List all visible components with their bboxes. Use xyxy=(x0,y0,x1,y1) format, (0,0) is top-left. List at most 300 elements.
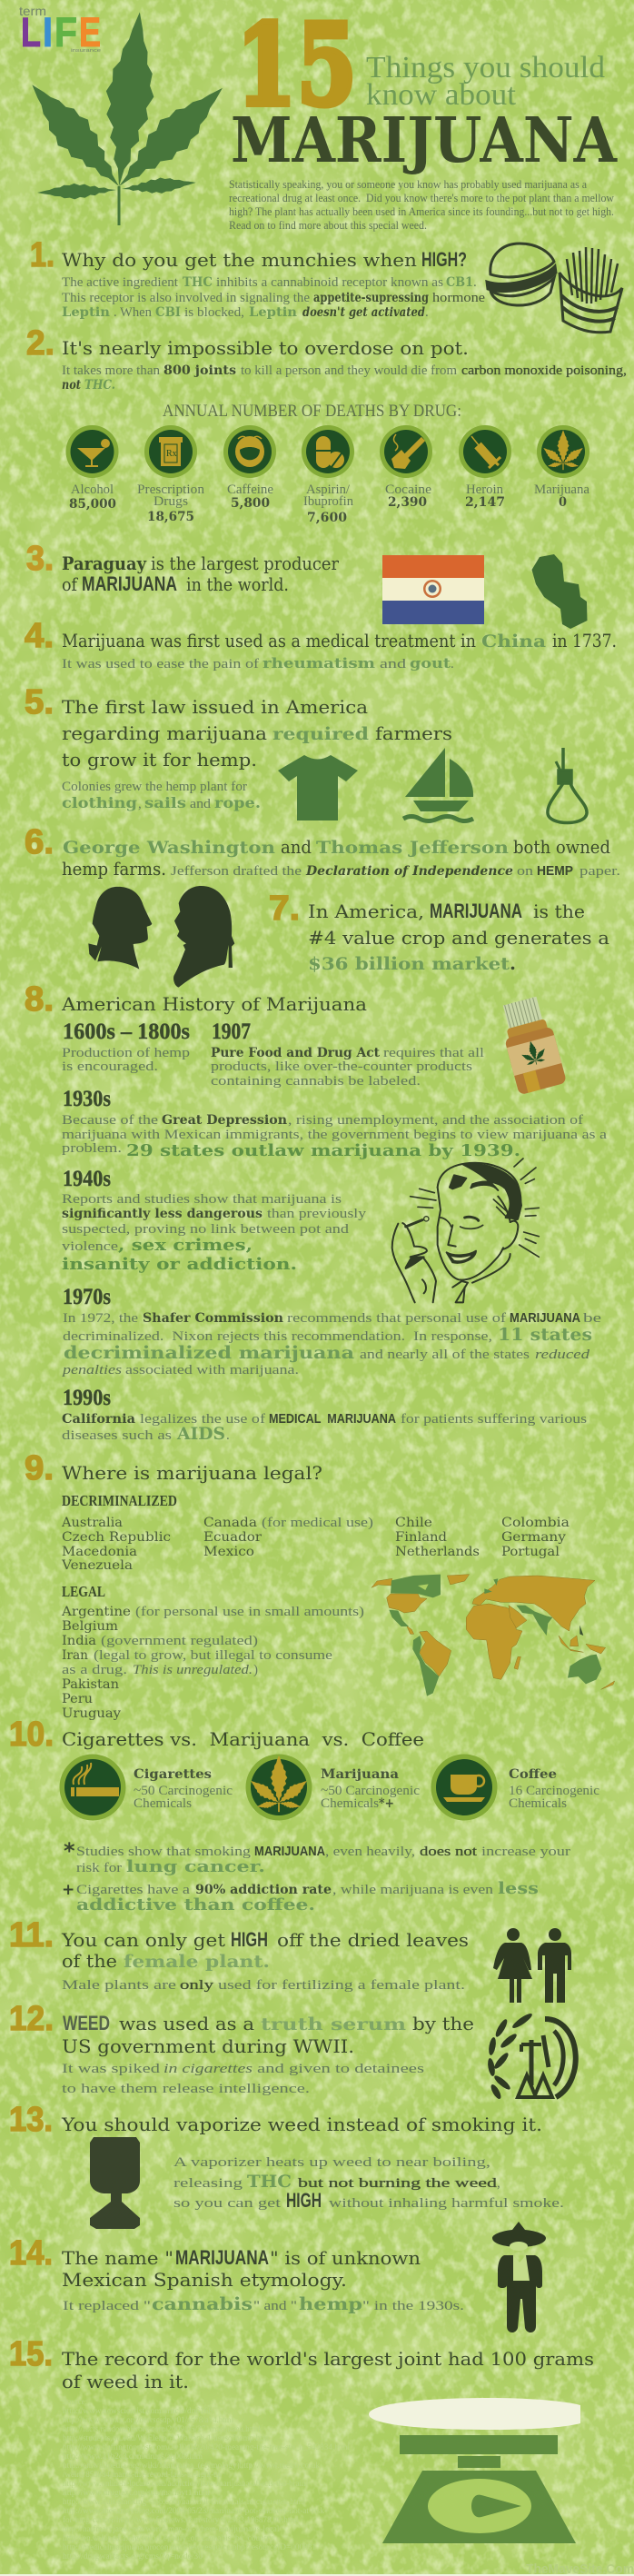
section 3: Paraguay: Paraguay xyxy=(62,552,147,574)
section 13: vaporize: but not burning the weed xyxy=(298,2176,498,2191)
list: legal countries: (government regulated) xyxy=(101,1634,258,1648)
list: legal countries: as a drug. xyxy=(62,1663,127,1677)
footnotes: lung cancer. xyxy=(126,1857,265,1876)
badge: alcohol xyxy=(65,425,118,512)
timeline: 1600s to 1800s xyxy=(62,1019,190,1074)
timeline: 1970s: decriminalized marijuana xyxy=(64,1343,354,1363)
list: legal countries xyxy=(61,1583,364,1721)
footnotes: Studies show that smoking xyxy=(76,1845,252,1859)
footnotes: Cigarettes have a xyxy=(76,1883,190,1897)
section 7: value crop: is the xyxy=(533,900,585,922)
list: decriminalized countries: Ecuador xyxy=(203,1530,262,1545)
section 3: Paraguay: is the largest producer xyxy=(151,552,339,574)
section 14: etymology: It replaced " xyxy=(63,2299,151,2313)
section 5: first law: sails xyxy=(144,794,186,811)
section 11: female plant xyxy=(9,1916,469,1993)
text block: sources: http://www.thecancerblog.com/2006/05/23/marijuana-pot-smokers-not-at-risk- xyxy=(63,2506,327,2515)
badge: aspirin and ibuprofen xyxy=(302,425,354,525)
timeline: 1940s: , sex crimes, xyxy=(118,1236,253,1255)
icon: sailboat xyxy=(403,748,473,821)
section 4: China: gout xyxy=(410,655,451,671)
list: legal countries: ) xyxy=(253,1663,258,1677)
illustration: retro man with joint xyxy=(392,1159,539,1302)
list: decriminalized countries: Mexico xyxy=(203,1545,254,1559)
section 2: overdose xyxy=(26,324,627,393)
section 1: munchies: CBI xyxy=(155,305,181,320)
comparison: coffee: 16 Carcinogenic xyxy=(509,1784,599,1798)
text block: sources: /weird/853884/marks-the-record-fails-to-light-up xyxy=(63,2470,222,2479)
text block: sources: http://drugwarfacts.org/cms/?q=node/30 xyxy=(63,2551,203,2561)
timeline: 1930s: problem. xyxy=(62,1141,122,1156)
comparison: coffee: Coffee xyxy=(509,1767,557,1782)
comparison: coffee: Chemicals xyxy=(509,1796,567,1811)
logo: term LIFE insurance: E xyxy=(79,9,101,55)
section 1: munchies: Why do you get the munchies when xyxy=(62,249,417,271)
section 6: Washington and Jefferson: hemp farms. xyxy=(62,858,166,880)
footnotes: risk for xyxy=(76,1861,122,1875)
section 15: largest joint: The record for the world's largest joint had 100 grams xyxy=(62,2348,594,2370)
list: decriminalized countries: Macedonia xyxy=(62,1545,137,1559)
comparison: marijuana: Chemicals xyxy=(321,1796,379,1811)
section 2: overdose: 800 joints xyxy=(163,363,236,378)
timeline: 1970s: 1970s xyxy=(63,1285,111,1309)
timeline: 1940s: significantly less dangerous xyxy=(62,1207,263,1221)
footnotes: addictive than coffee. xyxy=(76,1895,315,1915)
section 13: vaporize xyxy=(9,2101,564,2212)
section 12: truth serum: was used as a xyxy=(119,2013,254,2034)
section 1: munchies: appetite-supressing xyxy=(313,291,429,305)
section 13: vaporize: THC xyxy=(247,2172,292,2192)
list: legal countries: Iran xyxy=(62,1648,88,1663)
icon: man in sombrero xyxy=(492,2222,546,2332)
badge: prescription drugs: 18,675 xyxy=(147,510,194,524)
timeline: 1930s xyxy=(62,1087,607,1160)
section 5: first law: 5. xyxy=(25,683,54,721)
text block: sources: http://www.quit-smoking-stop.com/harmful-chemicals-in-cigarettes.html xyxy=(63,2497,306,2506)
icon: IRS seal xyxy=(487,2012,576,2101)
section 15: largest joint: of weed in it. xyxy=(62,2371,189,2392)
badge: aspirin and ibuprofen: Ibuprofin xyxy=(303,494,353,509)
chart: annual deaths by drug icons xyxy=(65,425,589,525)
timeline: 1970s: penalties xyxy=(62,1363,122,1378)
section 3: Paraguay: of xyxy=(62,573,78,595)
section 6: Washington and Jefferson: on xyxy=(517,864,534,879)
timeline: 1940s xyxy=(62,1167,367,1274)
section 14: etymology: cannabis xyxy=(152,2294,253,2314)
timeline: 1907: products, like over-the-counter products xyxy=(211,1059,472,1074)
badge: heroin: Heroin xyxy=(466,482,503,497)
section 5: first law: and xyxy=(190,797,212,811)
section 1: munchies: doesn't get activated xyxy=(302,305,425,320)
timeline: 1970s: decriminalized. Nixon rejects this recommendation. In response, xyxy=(63,1329,492,1344)
comparison: marijuana: ~50 Carcinogenic xyxy=(321,1784,420,1798)
section 12: truth serum: It was spiked xyxy=(62,2062,161,2076)
footnotes xyxy=(62,1838,570,1915)
section 1: munchies: . xyxy=(473,275,477,290)
badge: heroin: 2,147 xyxy=(465,495,505,510)
text block: sources: for-lung-cancer/http://www.foxnews.com/story/0,2933,196878,00.html xyxy=(63,2515,299,2524)
timeline: 1970s: In 1972, the xyxy=(63,1311,138,1326)
section 5: first law: , xyxy=(138,797,142,811)
section 13: vaporize: without inhaling harmful smoke. xyxy=(329,2196,564,2211)
section 12: truth serum: and given to detainees xyxy=(257,2062,424,2076)
badge: marijuana xyxy=(534,425,589,510)
timeline: 1930s: , rising unemployment, and the association of xyxy=(288,1113,583,1128)
list: legal countries: Pakistan xyxy=(62,1677,119,1692)
section 14: etymology: MARIJUANA xyxy=(175,2246,269,2269)
timeline: 1907: containing cannabis be labeled. xyxy=(211,1074,421,1089)
section 11: female plant: Male plants are xyxy=(62,1978,176,1993)
timeline: 1907: Pure Food and Drug Act xyxy=(211,1046,381,1060)
footnotes: less xyxy=(498,1879,539,1898)
list: decriminalized countries: Australia xyxy=(61,1516,123,1530)
section 3: Paraguay xyxy=(26,540,339,595)
icon: large cannabis leaf xyxy=(17,9,236,225)
text block: sources: http://www.mapinc.org/newscsdp/v01/a578/a14.html xyxy=(63,2415,233,2424)
icon: Paraguay map xyxy=(532,554,587,629)
section 14: etymology: hemp xyxy=(299,2294,362,2314)
section 5: first law xyxy=(25,683,452,811)
timeline: 1907: requires that all xyxy=(383,1046,484,1060)
section 11: female plant: 11. xyxy=(9,1916,54,1954)
timeline: 1940s: Reports and studies show that marijuana is xyxy=(62,1192,342,1207)
section 6: Washington and Jefferson xyxy=(25,823,620,880)
section 7: value crop: $36 billion market xyxy=(308,954,510,974)
timeline: 1600s to 1800s: 1600s – 1800s xyxy=(63,1019,190,1044)
comparison: cigarettes: ~50 Carcinogenic xyxy=(134,1784,233,1798)
badge: marijuana: Marijuana xyxy=(534,482,589,497)
timeline: 1930s: 1930s xyxy=(63,1087,111,1111)
badge: caffeine xyxy=(223,425,276,511)
badge: heroin xyxy=(459,425,511,510)
section 8: American history xyxy=(25,980,607,1444)
text block: sources: http://medicalmarijuana.procon.org/view.resource.php?resourceID=000881 xyxy=(63,2542,316,2551)
section 1: munchies: CB1 xyxy=(446,275,473,290)
timeline: 1970s: be xyxy=(583,1311,601,1326)
section 12: truth serum: truth serum xyxy=(261,2014,406,2034)
intro text: Read on to find more about this special weed. xyxy=(229,219,427,232)
timeline: 1940s: insanity or addiction. xyxy=(62,1255,297,1274)
section 4: China: Marijuana was first used as a medical treatment in xyxy=(62,630,476,651)
section 7: value crop: . xyxy=(510,952,516,974)
section 4: China: rheumatism xyxy=(263,655,375,671)
comparison: marijuana: *+ xyxy=(379,1796,394,1811)
timeline: 1990s: California xyxy=(62,1412,135,1427)
comparison: cigarettes: Cigarettes xyxy=(134,1767,212,1782)
icon: burger xyxy=(487,244,556,305)
section 5: first law: rope. xyxy=(214,794,261,811)
timeline: 1990s: for patients suffering various xyxy=(401,1412,587,1427)
logo: term LIFE insurance: F xyxy=(54,9,77,55)
section 14: etymology: " is of unknown xyxy=(270,2247,421,2269)
section 5: first law: The first law issued in America xyxy=(62,696,368,718)
icon: Jefferson silhouette xyxy=(173,886,234,988)
section 2: overdose: carbon monoxide poisoning, xyxy=(461,363,627,378)
timeline: 1990s xyxy=(62,1386,587,1444)
section 1: munchies: HIGH? xyxy=(421,248,467,271)
list: legal countries: Uruguay xyxy=(62,1706,121,1721)
list: legal countries: LEGAL xyxy=(62,1583,105,1600)
title: know about xyxy=(366,78,517,112)
list: decriminalized countries: Finland xyxy=(395,1530,447,1545)
section 12: truth serum: US government during WWII. xyxy=(62,2035,354,2057)
list: decriminalized countries: Portugal xyxy=(501,1545,560,1559)
section 4: China: . xyxy=(451,657,454,671)
section 1: munchies: Leptin xyxy=(62,305,110,320)
section 12: truth serum xyxy=(9,2000,474,2096)
section 5: first law: clothing xyxy=(62,794,137,811)
section 7: value crop: MARIJUANA xyxy=(430,900,522,922)
list: legal countries: Belgium xyxy=(62,1619,118,1634)
section 2: overdose: THC. xyxy=(84,378,115,393)
section 1: munchies: 1. xyxy=(30,236,54,274)
section 4: China xyxy=(25,617,617,671)
timeline: 1990s: . xyxy=(226,1428,230,1443)
icon: medicine bottle with leaf xyxy=(496,995,567,1095)
list: decriminalized countries: Chile xyxy=(395,1516,432,1530)
section 15: largest joint xyxy=(9,2335,594,2392)
section 11: female plant: only xyxy=(180,1978,214,1993)
timeline: 1990s: diseases such as xyxy=(62,1428,172,1443)
footnotes: does not xyxy=(420,1845,478,1859)
badge: alcohol: Alcohol xyxy=(71,482,114,497)
badge: cocaine xyxy=(380,425,432,510)
logo: term LIFE insurance: insurance xyxy=(71,48,101,54)
text block: sources xyxy=(63,2397,350,2561)
section 1: munchies xyxy=(30,236,485,320)
icon: Washington silhouette xyxy=(88,887,152,970)
section 11: female plant: of the xyxy=(62,1950,117,1972)
timeline: 1990s: 1990s xyxy=(63,1386,111,1410)
timeline: 1970s: recommends that personal use of xyxy=(287,1311,506,1326)
badge: alcohol: 85,000 xyxy=(69,497,116,512)
text block: sources: http://www.newscientist.com/article/dn6168 xyxy=(63,2406,213,2415)
logo: term LIFE insurance: I xyxy=(43,9,53,55)
logo: term LIFE insurance: term xyxy=(19,4,46,18)
section 1: munchies: Leptin xyxy=(249,305,297,320)
heading: annual deaths by drug: ANNUAL NUMBER OF DEATHS BY DRUG: xyxy=(163,402,461,421)
section 13: vaporize: 13. xyxy=(9,2101,53,2139)
section 13: vaporize: so you can get xyxy=(173,2196,282,2211)
comparison: marijuana: Marijuana xyxy=(321,1767,399,1782)
section 8: American history: 8. xyxy=(25,980,54,1019)
section 13: vaporize: You should vaporize weed instead of smoking it. xyxy=(61,2114,542,2135)
list: legal countries: (legal to grow, but illegal to consume xyxy=(94,1648,332,1663)
timeline: 1930s: marijuana with Mexican immigrants, the government begins to view marijuana as a xyxy=(62,1128,607,1142)
list: decriminalized countries: Czech Republic xyxy=(62,1530,171,1545)
badge: marijuana: 0 xyxy=(559,495,567,510)
section 7: value crop: 7. xyxy=(269,890,300,928)
timeline: 1940s: than previously xyxy=(267,1207,367,1221)
text block: sources: http://www.onlinehelpcare.com/addiction/how-marijuana-affects-the-brain/ xyxy=(63,2479,308,2488)
list: legal countries: (for personal use in small amounts) xyxy=(135,1605,364,1619)
timeline: 1930s: 29 states outlaw marijuana by 1939. xyxy=(126,1141,520,1160)
section 5: first law: Colonies grew the hemp plant for xyxy=(62,780,247,794)
section 13: vaporize: HIGH xyxy=(286,2189,322,2212)
section 1: munchies: hormone xyxy=(432,291,485,305)
timeline: 1970s: and nearly all of the states xyxy=(360,1348,530,1362)
section 1: munchies: . When xyxy=(114,305,152,320)
badge: caffeine: Caffeine xyxy=(227,482,273,497)
section 12: truth serum: in cigarettes xyxy=(163,2062,253,2076)
timeline: 1600s to 1800s: is encouraged. xyxy=(62,1059,158,1074)
section 3: Paraguay: in the world. xyxy=(186,573,289,595)
title xyxy=(231,0,618,177)
section 5: first law: required xyxy=(272,724,369,744)
timeline: 1930s: Great Depression xyxy=(162,1113,287,1128)
section 9: where legal xyxy=(25,1449,570,1721)
text block: sources: http://students.ou.edu/W/Elena.A.Wallach-1/usesofhemp.htm xyxy=(63,2433,269,2442)
timeline: 1970s: 11 states xyxy=(498,1325,592,1345)
section 14: etymology: Mexican Spanish etymology. xyxy=(62,2269,347,2291)
intro text: recreational drug at least once. Did you know there's more to the pot plant than a mellow xyxy=(229,192,614,204)
section 6: Washington and Jefferson: both owned xyxy=(513,836,610,858)
section 6: Washington and Jefferson: 6. xyxy=(25,823,54,861)
section 14: etymology: " in the 1930s. xyxy=(362,2299,464,2313)
timeline: 1970s: reduced xyxy=(535,1348,590,1362)
timeline: 1907 xyxy=(211,1019,484,1089)
section 6: Washington and Jefferson: HEMP xyxy=(537,863,573,879)
section 13: vaporize: A vaporizer heats up weed to near boiling, xyxy=(173,2155,490,2170)
timeline: 1990s: MEDICAL MARIJUANA xyxy=(269,1411,396,1427)
section 1: munchies: This receptor is also involved in signaling the xyxy=(62,291,310,305)
text block: sources: http://facts.randomhistory.com/2009/05/27_marijuana.html xyxy=(63,2424,262,2433)
section 8: American history: American History of Marijuana xyxy=(61,993,367,1015)
icon: joint on scale xyxy=(369,2398,580,2543)
list: decriminalized countries: Netherlands xyxy=(395,1545,480,1559)
section 14: etymology: 14. xyxy=(9,2234,53,2273)
section 7: value crop: #4 value crop and generates a xyxy=(308,927,609,949)
timeline: 1970s: MARIJUANA xyxy=(510,1310,580,1326)
section 7: value crop xyxy=(269,890,609,974)
section 4: China: 4. xyxy=(25,617,54,655)
section 6: Washington and Jefferson: Jefferson drafted the xyxy=(171,864,302,879)
text block: sources: http://en.wikipedia.org/wiki/Marijuana_(etymology)http://www.metro.co.uk xyxy=(63,2461,321,2470)
text block: sources: http://www.a1b2c3.com/drugs/ap008.htm xyxy=(63,2452,203,2461)
intro text: Statistically speaking, you or someone you know has probably used marijuana as a xyxy=(229,178,587,191)
footnotes: , even heavily, xyxy=(325,1845,415,1859)
section 5: first law: to grow it for hemp. xyxy=(62,749,257,771)
title: 15 xyxy=(236,0,357,132)
section 6: Washington and Jefferson: George Washington xyxy=(63,838,275,858)
section 11: female plant: female plant. xyxy=(124,1952,270,1972)
icon: t-shirt xyxy=(278,755,358,821)
logo: term LIFE insurance: L xyxy=(21,9,41,55)
section 4: China: China xyxy=(481,632,546,651)
footnotes: , while marijuana is even xyxy=(332,1883,494,1897)
footnotes: increase your xyxy=(481,1845,570,1859)
badge: prescription drugs: Drugs xyxy=(154,494,188,509)
section 10: cigarettes vs marijuana vs coffee: Cigarettes vs. Marijuana vs. Coffee xyxy=(62,1728,424,1750)
badge: prescription drugs: Rx xyxy=(166,449,177,459)
list: decriminalized countries: (for medical use) xyxy=(262,1516,373,1530)
comparison: coffee xyxy=(431,1754,599,1821)
comparison: cigarettes: Chemicals xyxy=(134,1796,192,1811)
section 14: etymology: The name " xyxy=(62,2247,173,2269)
section 11: female plant: used for fertilizing a female plant. xyxy=(218,1978,465,1993)
badge: prescription drugs: Prescription xyxy=(137,482,204,497)
section 12: truth serum: by the xyxy=(412,2013,474,2034)
badge: aspirin and ibuprofen: 7,600 xyxy=(307,511,347,525)
section 10: cigarettes vs marijuana vs coffee: 10. xyxy=(9,1716,54,1754)
list: legal countries: India xyxy=(62,1634,96,1648)
section 9: where legal: 9. xyxy=(25,1449,54,1487)
map: world legality xyxy=(371,1575,615,1696)
footnotes: * xyxy=(64,1838,75,1864)
list: legal countries: Argentine xyxy=(61,1605,131,1619)
section 2: overdose: It takes more than xyxy=(62,363,160,378)
timeline: 1990s: legalizes the use of xyxy=(140,1412,265,1427)
badge: cocaine: Cocaine xyxy=(385,482,431,497)
section 1: munchies: The active ingredient xyxy=(62,275,179,290)
footnotes: MARIJUANA xyxy=(254,1844,325,1859)
section 12: truth serum: to have them release intelligence. xyxy=(62,2082,310,2096)
section 3: Paraguay: MARIJUANA xyxy=(82,572,177,595)
section 6: Washington and Jefferson: Thomas Jefferson xyxy=(316,838,509,858)
text block: sources: http://www.huffingtonpost.com/2010/04/20/420-meaning-the-true-sto_n_543834.html xyxy=(63,2442,350,2452)
section 2: overdose: to kill a person and they would die from xyxy=(241,363,457,378)
timeline: 1907: 1907 xyxy=(212,1019,251,1044)
section 2: overdose: not xyxy=(62,378,82,393)
section 13: vaporize: releasing xyxy=(173,2176,243,2191)
footnotes: + xyxy=(62,1881,74,1899)
section 13: vaporize: , xyxy=(497,2176,500,2191)
icon: fries xyxy=(560,247,622,333)
list: decriminalized countries: Venezuela xyxy=(61,1558,133,1573)
section 15: largest joint: 15. xyxy=(9,2335,53,2373)
section 6: Washington and Jefferson: and xyxy=(281,836,312,858)
section 10: cigarettes vs marijuana vs coffee xyxy=(9,1716,599,1915)
intro text xyxy=(229,178,614,232)
logo: term LIFE insurance xyxy=(19,4,101,55)
footnotes: 90% addiction rate xyxy=(195,1883,332,1897)
section 4: China: It was used to ease the pain of xyxy=(62,657,259,671)
section 4: China: and xyxy=(380,657,407,671)
list: decriminalized countries: DECRIMINALIZED xyxy=(62,1492,177,1509)
text block: sources: http://en.wikipedia.org/wiki/Legality_of_cannabis_by_country xyxy=(63,2533,274,2542)
badge: caffeine: 5,800 xyxy=(231,496,270,511)
text block: sources: http://halfmaryjane.com/world-map-of-where-marijuana-is-legal/ xyxy=(63,2524,282,2533)
section 2: overdose: 2. xyxy=(26,324,54,363)
icon: woman and man figures xyxy=(493,1928,571,2003)
timeline: 1940s: 1940s xyxy=(63,1167,111,1191)
title: Things you should xyxy=(366,51,605,85)
timeline: 1940s: suspected, proving no link between pot and xyxy=(62,1222,350,1237)
badge: aspirin and ibuprofen: Aspirin/ xyxy=(306,482,351,497)
timeline: 1970s: associated with marijuana. xyxy=(125,1363,299,1378)
section 1: munchies: is blocked, xyxy=(184,305,244,320)
badge: cocaine: 2,390 xyxy=(388,495,427,510)
list: decriminalized countries: Canada xyxy=(203,1516,257,1530)
section 11: female plant: HIGH xyxy=(231,1928,268,1951)
icon: Paraguay flag xyxy=(382,555,484,624)
section 6: Washington and Jefferson: paper. xyxy=(580,864,620,879)
section 1: munchies: THC xyxy=(183,275,213,290)
section 3: Paraguay: 3. xyxy=(26,540,54,578)
section 11: female plant: off the dried leaves xyxy=(277,1929,469,1951)
section 14: etymology: " and " xyxy=(253,2299,297,2313)
section 5: first law: farmers xyxy=(375,722,452,744)
list: decriminalized countries xyxy=(61,1492,570,1573)
timeline: 1930s: Because of the xyxy=(62,1113,158,1128)
section 12: truth serum: WEED xyxy=(63,2012,110,2034)
section 4: China: in 1737. xyxy=(552,630,617,651)
icon: noose xyxy=(548,748,587,823)
list: decriminalized countries: Germany xyxy=(501,1530,566,1545)
text block: sources: http://www.drugtext.org/sub/marinyt1.html xyxy=(63,2488,211,2497)
section 5: first law: regarding marijuana xyxy=(62,722,267,744)
comparison: cigarettes xyxy=(60,1754,233,1821)
